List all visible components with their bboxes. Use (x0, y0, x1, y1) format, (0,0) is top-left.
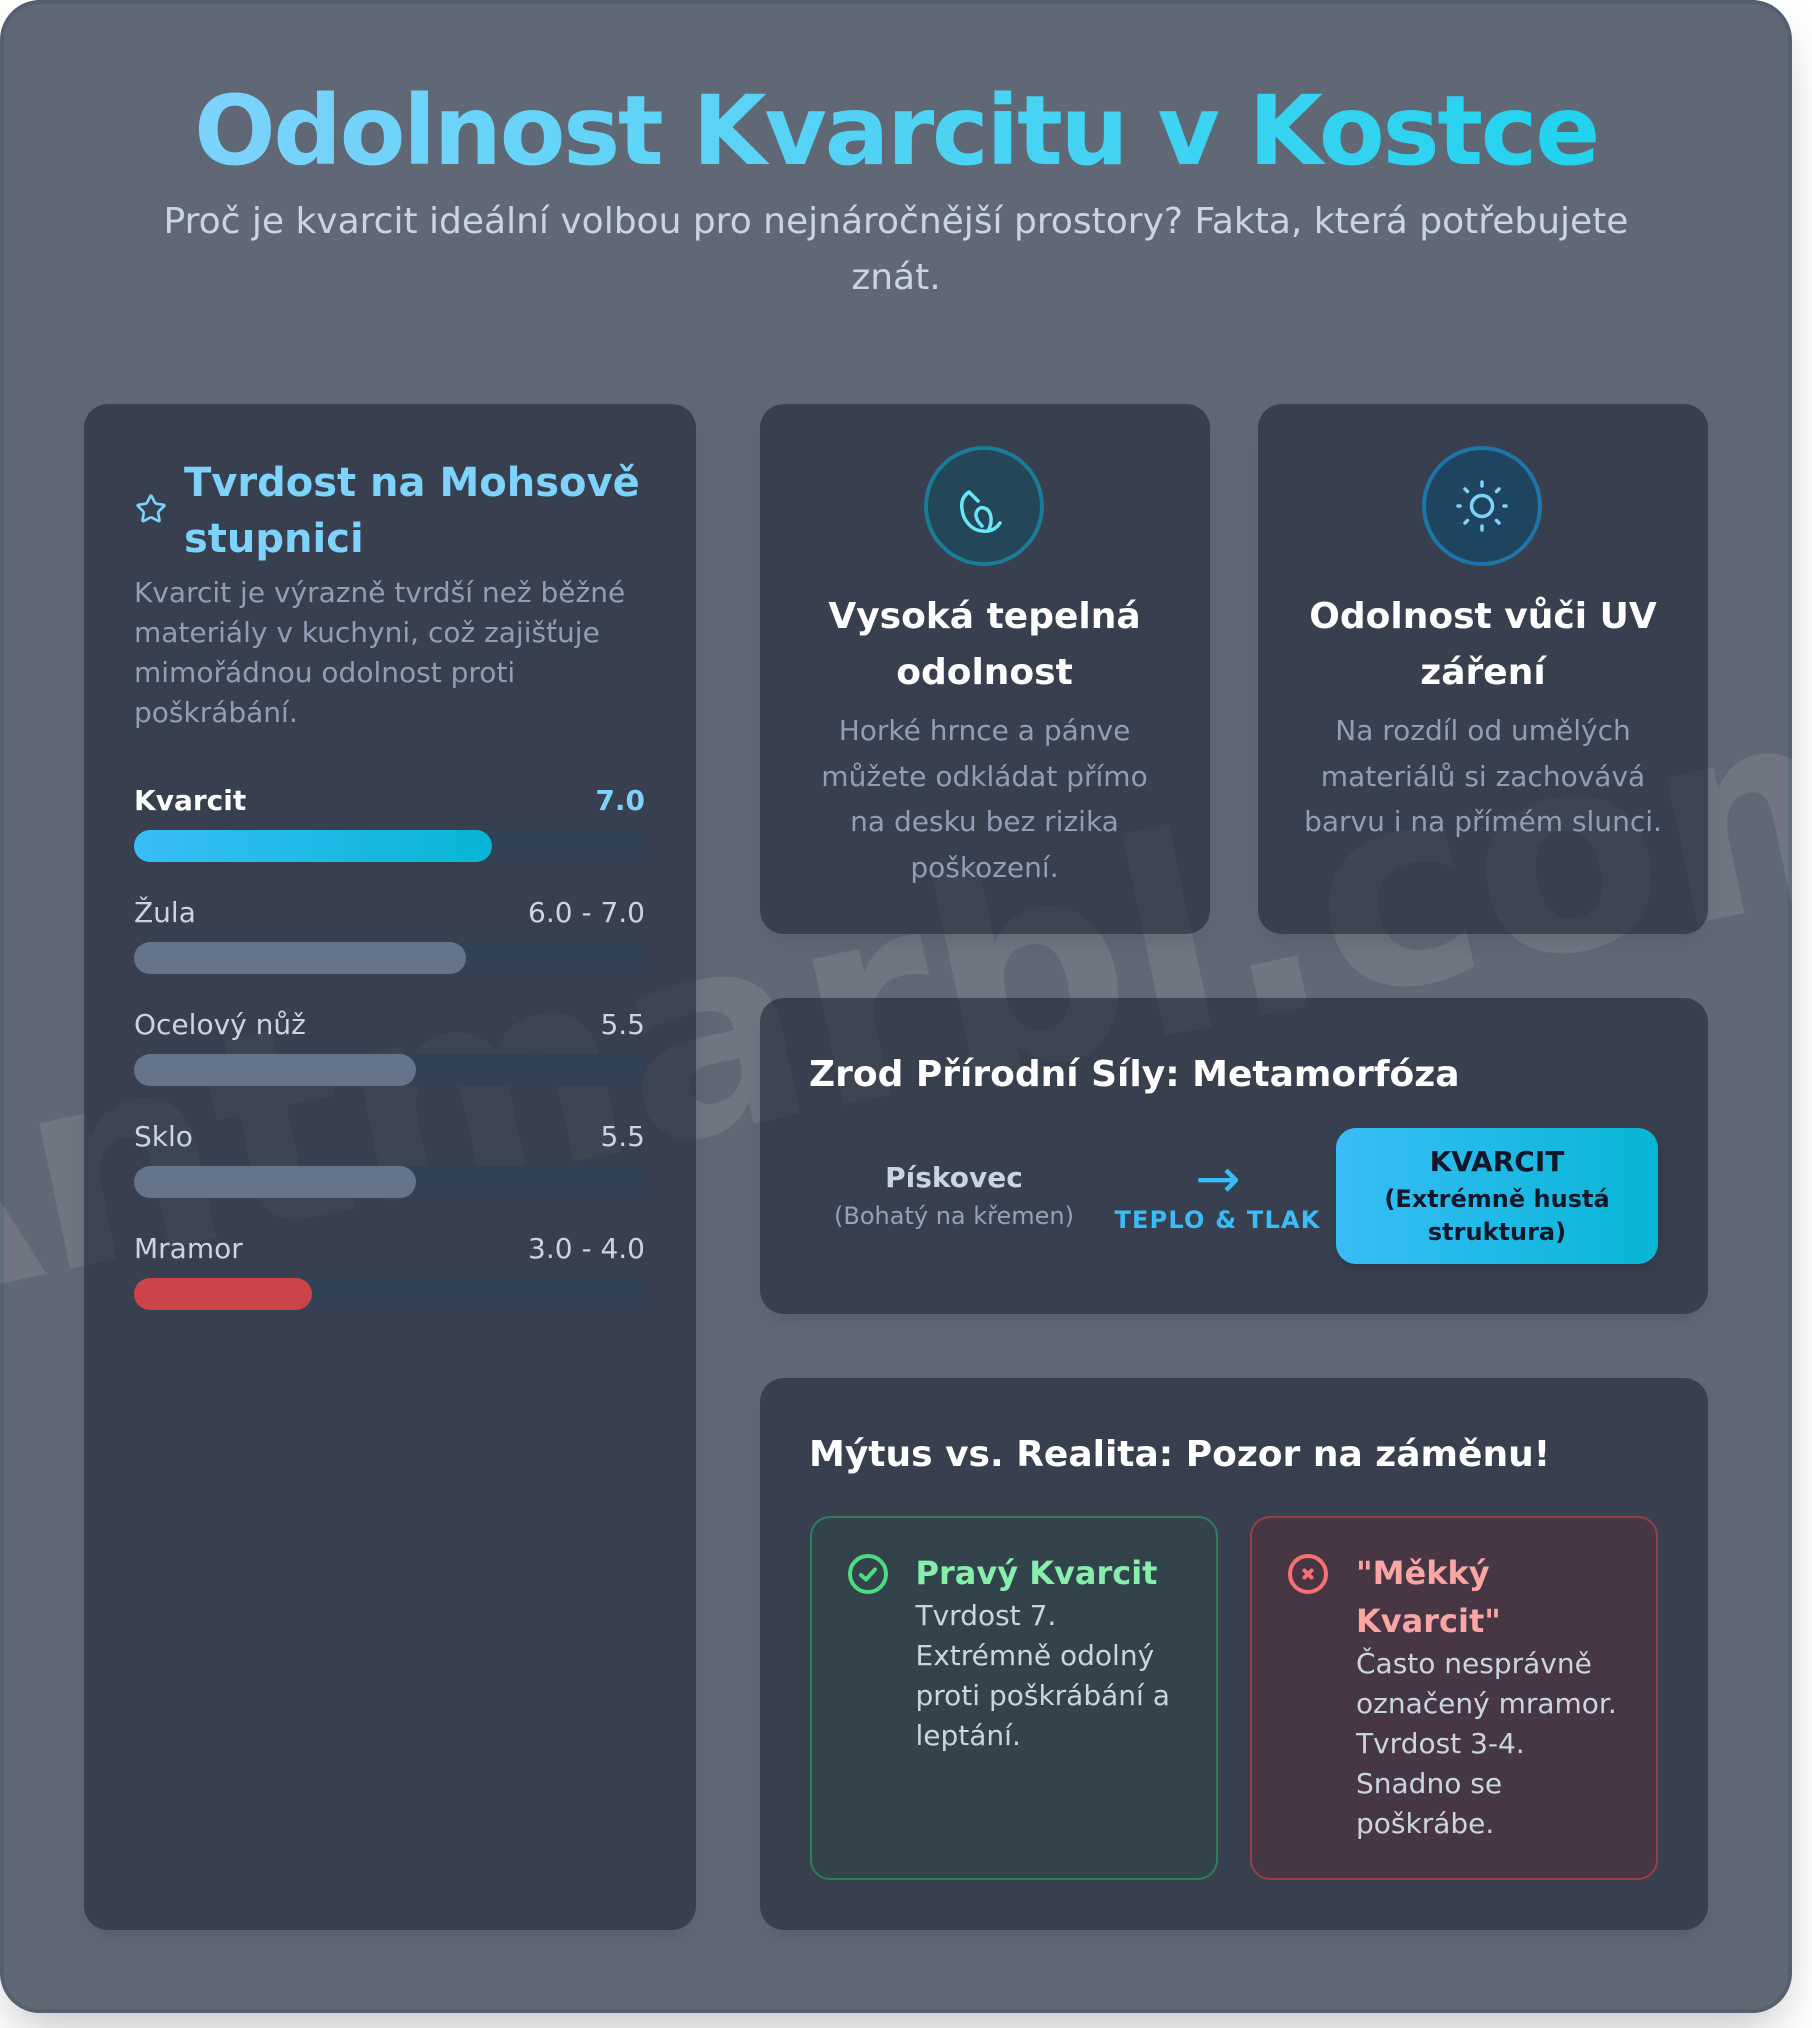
text: dense structure (1384, 1185, 1610, 1246)
text: soft quartzite: Tvrdost 3-4. (1356, 1726, 1525, 1760)
text: soft quartzite: poškrábe. (1356, 1806, 1494, 1840)
subtitle (164, 201, 1628, 298)
value: Mramor: 3.0 - 4.0 (528, 1232, 645, 1264)
text: UV resistance (1304, 714, 1662, 838)
bar: Žula (134, 942, 645, 974)
text: heat resistance: můžete odkládat přímo (821, 760, 1148, 792)
text: soft quartzite: označený mramor. (1356, 1686, 1617, 1720)
heading: heat resistance: odolnost (896, 652, 1073, 693)
text: real quartzite: leptání. (916, 1718, 1021, 1752)
label: Kvarcit: Kvarcit (134, 784, 246, 816)
subtitle: Proč je kvarcit ideální volbou pro nejnáročnější prostory? Fakta, která potřebujete (164, 201, 1628, 242)
text: sandstone: Pískovec (885, 1160, 1023, 1194)
heading: UV resistance (1309, 596, 1657, 693)
text: real quartzite: Tvrdost 7. (916, 1598, 1056, 1632)
text: Mohs description: Kvarcit je výrazně tvrdší než běžné (134, 576, 625, 608)
heading: Mohs hardness: stupnici (184, 516, 364, 562)
text: soft quartzite: Snadno se (1356, 1766, 1502, 1800)
heading: soft quartzite: "Měkký (1356, 1554, 1490, 1592)
bar: Kvarcit (134, 830, 645, 862)
heading: Mohs hardness: Tvrdost na Mohsově (184, 460, 640, 506)
text: UV resistance: materiálů si zachovává (1321, 760, 1645, 792)
heading: heat resistance (828, 596, 1141, 693)
heading: real quartzite: Pravý Kvarcit (916, 1554, 1157, 1592)
text: Mohs description: mimořádnou odolnost proti (134, 656, 515, 688)
value: Kvarcit: 7.0 (595, 784, 645, 816)
heading: UV resistance: Odolnost vůči UV (1309, 596, 1657, 637)
label: Žula: Žula (134, 896, 196, 928)
icon: sun (1422, 446, 1542, 566)
value: Žula: 6.0 - 7.0 (528, 896, 645, 928)
subtitle: znát. (851, 257, 941, 298)
icon: star (136, 494, 166, 522)
icon: check circle (848, 1554, 888, 1594)
text: Mohs description: materiály v kuchyni, což zajišťuje (134, 616, 600, 648)
heading: metamorphosis: Zrod Přírodní Síly: Metamorfóza (809, 1054, 1460, 1094)
text: Mohs description (134, 576, 625, 728)
text: soft quartzite: Často nesprávně (1356, 1646, 1592, 1680)
panel: myth vs reality (760, 1378, 1708, 1930)
heading: Mohs hardness (184, 460, 640, 562)
label: Sklo: Sklo (134, 1120, 193, 1152)
value: Sklo: 5.5 (600, 1120, 645, 1152)
panel: heat resistance (760, 404, 1210, 934)
box: soft quartzite (1250, 1516, 1658, 1880)
text: soft quartzite (1356, 1646, 1617, 1840)
heading: UV resistance: záření (1420, 652, 1546, 693)
icon: flame (924, 446, 1044, 566)
box: quartzite result (1336, 1128, 1658, 1264)
panel: Mohs hardness (84, 404, 696, 1930)
text: heat resistance: Horké hrnce a pánve (839, 714, 1130, 747)
text: heat resistance: poškození. (910, 850, 1059, 884)
text: dense structure: (Extrémně hustá (1384, 1185, 1610, 1213)
panel: metamorphosis (760, 998, 1708, 1314)
text: Mohs description: poškrábání. (134, 696, 298, 728)
text: sandstone note: (Bohatý na křemen) (834, 1202, 1074, 1230)
bar: Sklo (134, 1166, 645, 1198)
title: Odolnost Kvarcitu v Kostce (194, 75, 1598, 187)
heading: soft quartzite (1356, 1554, 1501, 1640)
heading: soft quartzite: Kvarcit" (1356, 1602, 1501, 1640)
text: real quartzite (915, 1598, 1170, 1752)
text: UV resistance: Na rozdíl od umělých (1335, 714, 1631, 747)
value: Ocelový nůž: 5.5 (600, 1008, 645, 1040)
label: Mramor: Mramor (134, 1232, 243, 1264)
bar: Mramor (134, 1278, 645, 1310)
heading: myth vs reality: Mýtus vs. Realita: Pozor na záměnu! (809, 1434, 1550, 1475)
text: UV resistance: barvu i na přímém slunci. (1304, 805, 1662, 838)
box: real quartzite (810, 1516, 1218, 1880)
bar: Ocelový nůž (134, 1054, 645, 1086)
text: real quartzite: proti poškrábání a (916, 1678, 1170, 1712)
heading: heat resistance: Vysoká tepelná (828, 596, 1141, 637)
text: real quartzite: Extrémně odolný (916, 1638, 1154, 1672)
text: dense structure: struktura) (1428, 1218, 1566, 1246)
text: heat resistance: na desku bez rizika (850, 805, 1119, 838)
label: Ocelový nůž: Ocelový nůž (134, 1008, 306, 1040)
text: heat resistance (821, 714, 1148, 884)
text: KVARCIT: KVARCIT (1430, 1145, 1564, 1178)
panel: UV resistance (1258, 404, 1708, 934)
label: heat and pressure: TEPLO & TLAK (1114, 1206, 1321, 1234)
arrow: → (1195, 1147, 1241, 1210)
icon: x circle (1288, 1554, 1328, 1594)
